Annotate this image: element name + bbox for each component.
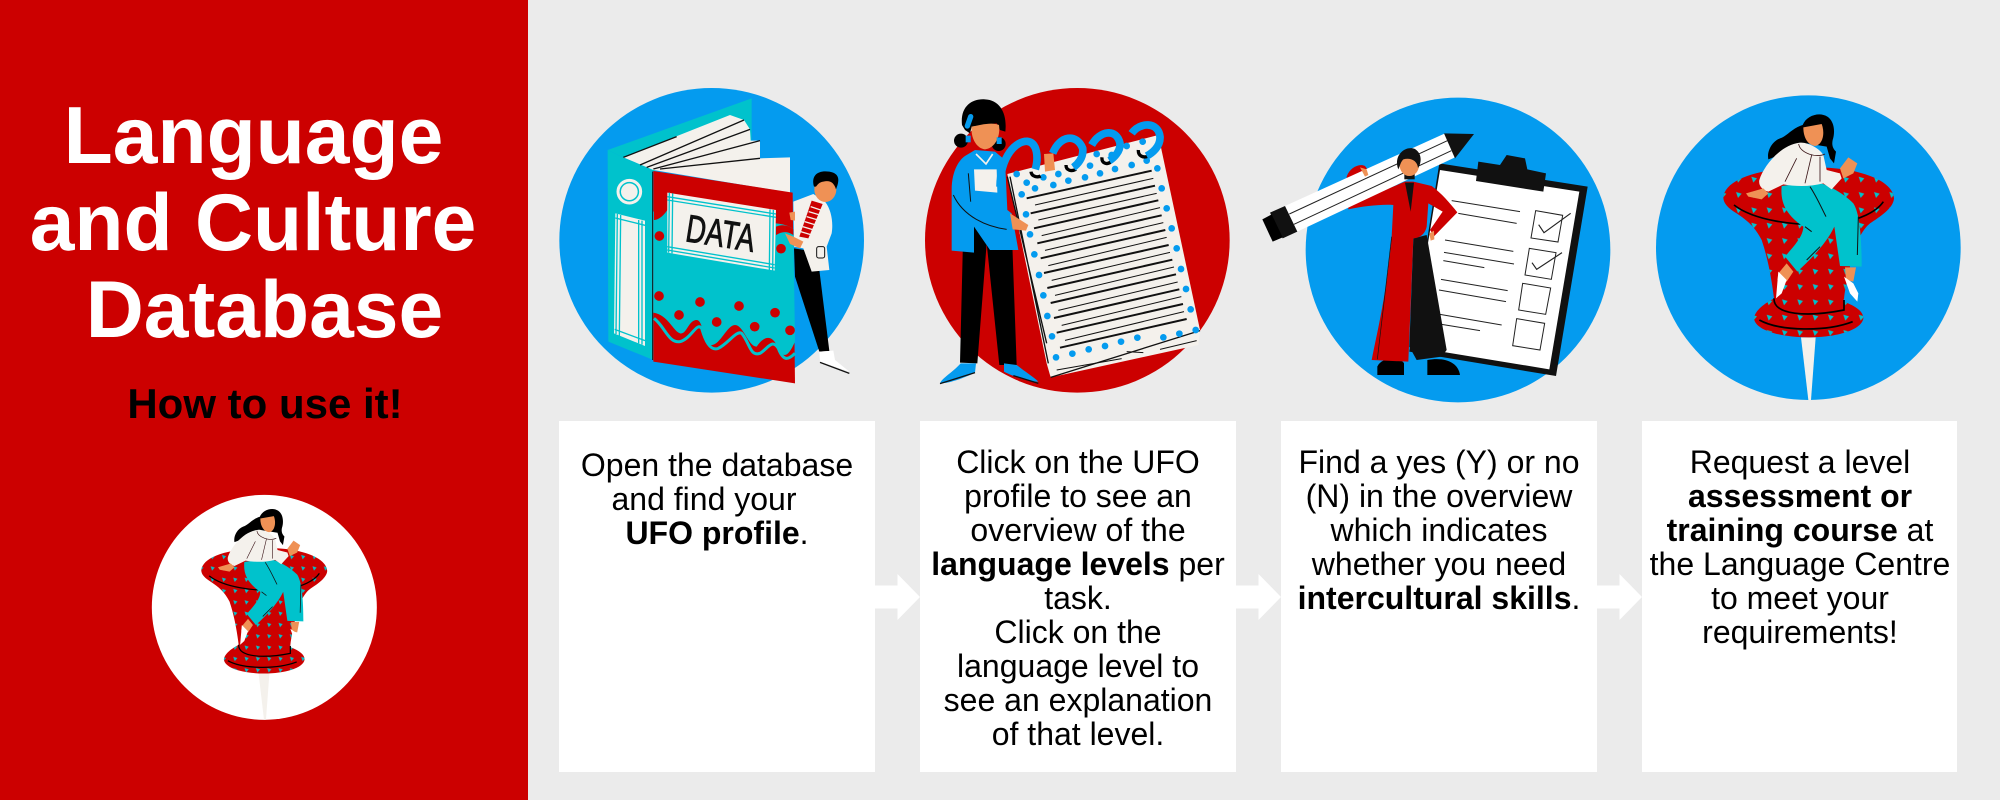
illustration: step 4 pin girl <box>1656 95 1961 400</box>
card: step 2: overview of the <box>970 512 1186 548</box>
card: step 1 <box>559 420 875 772</box>
arrow: step 1 to 2 <box>875 574 920 620</box>
card: step 1: UFO profile. <box>625 515 809 551</box>
card: step 3: Find a yes (Y) or no <box>1298 444 1580 480</box>
title: and Culture <box>30 178 476 268</box>
illustration: step 3 checklist and pencil <box>1262 98 1610 402</box>
card: step 3 <box>1281 420 1597 772</box>
card: step 2: see an explanation <box>944 682 1212 718</box>
panel: red title sidebar <box>0 0 528 800</box>
figure: man's head <box>1397 148 1421 179</box>
icon: clipboard checklist <box>1409 155 1588 376</box>
card: step 4: the Language Centre <box>1650 546 1950 582</box>
card: step 2: language level to <box>957 648 1199 684</box>
title: Language <box>64 91 443 181</box>
figure: man with pencil <box>1347 165 1460 375</box>
illustration: step 2 notepad <box>925 88 1230 393</box>
figure: girl sitting on pushpin <box>1723 114 1894 400</box>
card: step 3: which indicates <box>1330 512 1548 548</box>
card: step 2: Click on the UFO <box>956 444 1200 480</box>
card: step 2: language levels per <box>931 546 1225 582</box>
figure: woman holding notepad <box>940 99 1038 384</box>
card: step 3: intercultural skills. <box>1298 580 1580 616</box>
card: step 2: task. <box>1044 580 1112 616</box>
card: step 4: requirements! <box>1702 614 1898 650</box>
subtitle: How to use it! <box>127 380 403 427</box>
card: step 2: of that level. <box>992 716 1164 752</box>
card: step 2: Click on the <box>994 614 1162 650</box>
card: step 3: (N) in the overview <box>1306 478 1572 514</box>
icon: giant pencil <box>1262 133 1474 242</box>
card: step 4: training course at <box>1667 512 1933 548</box>
card: step 3: whether you need <box>1312 546 1566 582</box>
card: step 1: Open the database <box>581 446 853 482</box>
card: step 4: to meet your <box>1711 580 1889 616</box>
label: DATA: DATA <box>683 207 758 261</box>
card: step 2: profile to see an <box>964 478 1192 514</box>
card: step 4 <box>1642 420 1957 772</box>
illustration: step 1 data folder <box>559 88 864 393</box>
arrow: step 3 to 4 <box>1597 574 1642 620</box>
card: step 4: assessment or <box>1688 478 1912 514</box>
card: step 1: and find your <box>611 481 796 517</box>
title <box>30 91 476 355</box>
icon: small pin girl in white circle <box>152 494 377 720</box>
figure: man behind folder <box>785 171 849 373</box>
icon: spiral notepad <box>1000 125 1200 377</box>
card: step 4: Request a level <box>1690 444 1910 480</box>
arrow: step 2 to 3 <box>1236 574 1281 620</box>
card: step 2 <box>920 420 1236 772</box>
title: Database <box>86 265 443 355</box>
